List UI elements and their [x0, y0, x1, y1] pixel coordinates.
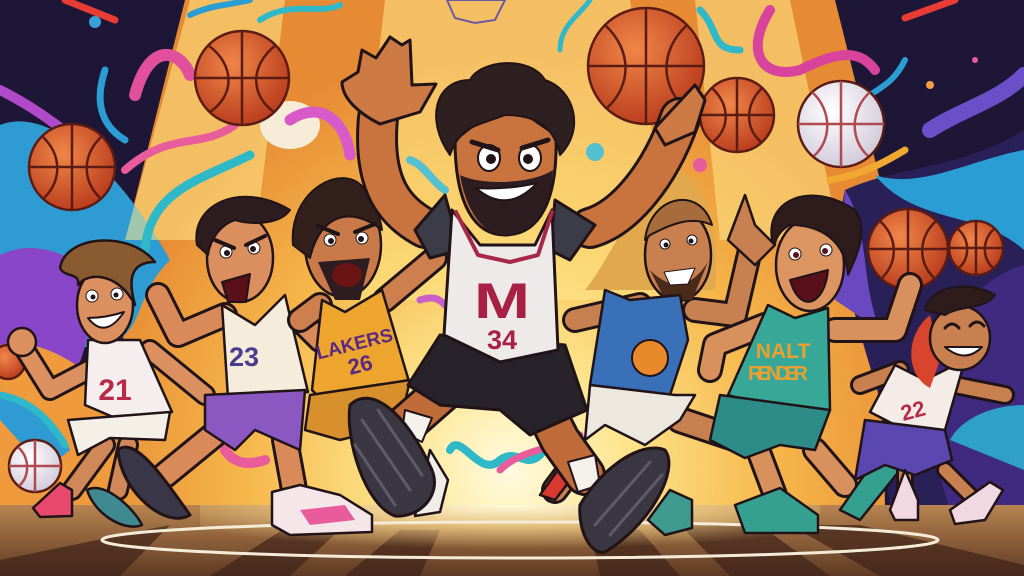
- jersey: [85, 340, 172, 420]
- corner streaks: [65, 0, 978, 172]
- ball 4: [700, 78, 774, 152]
- player: far left: [8, 240, 205, 527]
- jersey: 23: [229, 342, 259, 372]
- shoe left: [349, 398, 448, 516]
- sock left: [402, 410, 432, 442]
- shoe right: [580, 448, 669, 552]
- jersey: 22: [898, 396, 928, 426]
- ball 7: [949, 221, 1003, 275]
- jersey: [590, 290, 688, 395]
- head: [60, 240, 155, 343]
- shorts: [408, 335, 587, 435]
- jersey: [444, 210, 558, 362]
- player: right back (blue jersey): [540, 170, 750, 535]
- ball 6: [868, 209, 948, 289]
- ball 5 white: [798, 81, 884, 167]
- ball 3: [588, 8, 704, 124]
- head: [293, 178, 382, 300]
- jersey: [870, 360, 965, 430]
- player: center: [342, 37, 705, 552]
- head: [196, 197, 290, 302]
- jersey: 26: [345, 350, 375, 380]
- hand right: [655, 85, 705, 145]
- jersey: M: [474, 273, 530, 329]
- hand: [8, 328, 36, 356]
- head: [645, 200, 712, 301]
- floor: [0, 505, 1024, 576]
- player: left third (gold jersey): [293, 178, 435, 440]
- shoes: [118, 447, 372, 535]
- finger: [728, 195, 775, 265]
- basketball hoop net: [447, 0, 505, 23]
- player: right front (teal jersey): [710, 195, 910, 533]
- sock right: [568, 455, 600, 492]
- jersey: [222, 295, 308, 398]
- light beams: [125, 0, 840, 300]
- player: far right: [855, 287, 1005, 524]
- jersey: LAKERS: [314, 325, 395, 364]
- jersey: [728, 305, 830, 410]
- head: [771, 196, 861, 311]
- ball 2: [29, 124, 115, 210]
- hand left: [342, 37, 436, 124]
- jersey: [312, 290, 410, 420]
- head: [436, 63, 574, 235]
- jersey: 34: [487, 325, 517, 355]
- shirt sleeves: [415, 195, 595, 260]
- player: left second: [118, 197, 372, 535]
- head: [911, 287, 995, 388]
- jersey: 21: [98, 374, 132, 407]
- ball 9: [0, 345, 25, 379]
- jersey: NALT: [756, 340, 810, 363]
- jersey: RENDER: [748, 363, 809, 385]
- ball 1: [195, 31, 289, 125]
- ball 8 white: [9, 440, 61, 492]
